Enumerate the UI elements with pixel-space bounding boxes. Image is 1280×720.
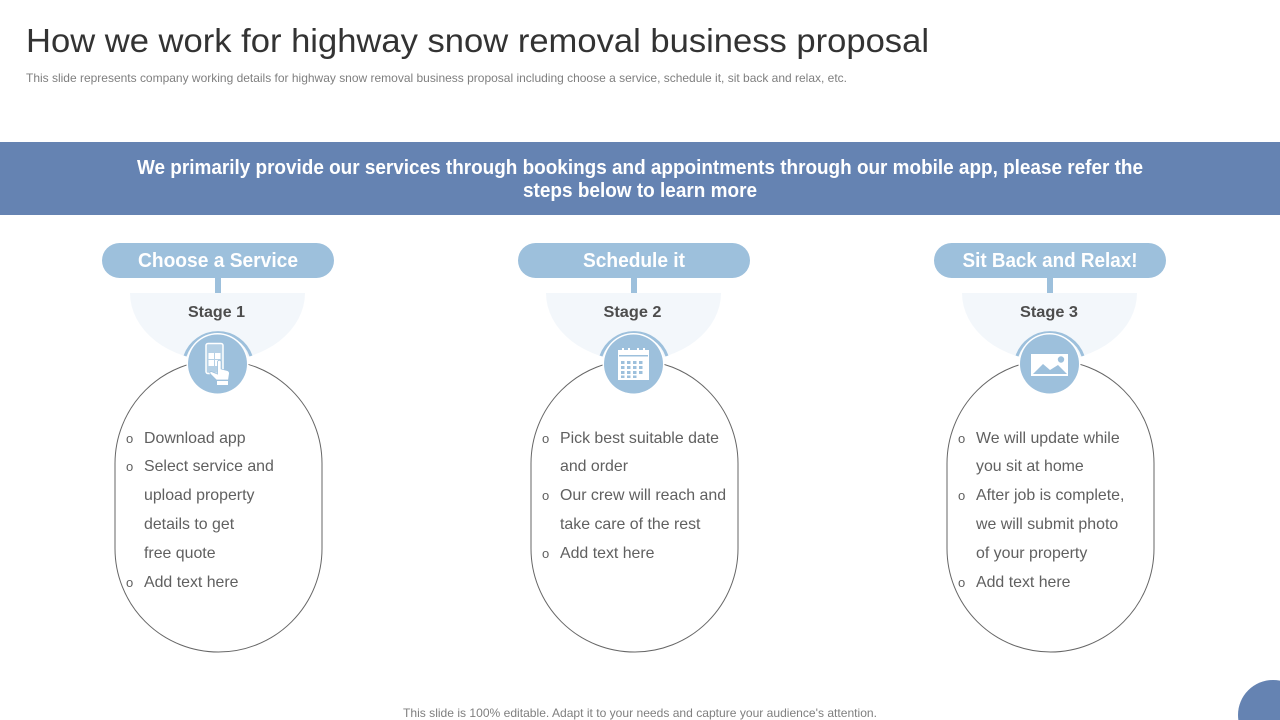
stage 2 list: Our crew will reach and [560, 487, 726, 504]
panel: stage 3 [934, 243, 1166, 652]
stage 1 list: o [126, 575, 133, 590]
stage 2 list: take care of the rest [560, 516, 701, 533]
stage 3 label: Stage 3 [1020, 304, 1078, 321]
stage 3 list: o [958, 488, 965, 503]
stage 2 list: and order [560, 458, 629, 475]
banner: We primarily provide our services through bookings and appointments through our mobile app, please refer the [137, 157, 1143, 179]
banner: steps below to learn more [523, 180, 757, 202]
footer note: This slide is 100% editable. Adapt it to your needs and capture your audience's attention. [403, 706, 877, 720]
stage 1 list: Add text here [144, 574, 239, 591]
stage 2 list: Pick best suitable date [560, 430, 719, 447]
stage 3 oval [947, 360, 1154, 652]
stage 3 list: you sit at home [976, 458, 1084, 475]
stage 3 connector [1047, 278, 1053, 293]
stage 3 list: o [958, 431, 965, 446]
stage 1 list: upload property [144, 487, 254, 504]
corner circle [1238, 680, 1280, 720]
stage 1 oval [115, 360, 322, 652]
stage 1 list [126, 430, 274, 591]
stage 2 label: Stage 2 [604, 304, 662, 321]
stage 3 list: We will update while [976, 430, 1120, 447]
stage 1 list: Select service and [144, 458, 274, 475]
stage 3 pill heading: Sit Back and Relax! [962, 250, 1138, 272]
stage 2 list: o [542, 488, 549, 503]
stage 3 list: of your property [976, 545, 1087, 562]
stage 1 list: free quote [144, 545, 216, 562]
panel: stage 2 [518, 243, 750, 652]
stage 3 half circle [962, 293, 1137, 361]
panel: stage 1 [102, 243, 334, 652]
stage 3 list [958, 430, 1124, 591]
stage 2 list: Add text here [560, 545, 655, 562]
stage 3 list: o [958, 575, 965, 590]
banner [0, 142, 1280, 215]
stage 1 list: details to get [144, 516, 235, 533]
stage 1 connector [215, 278, 221, 293]
stage 2 connector [631, 278, 637, 293]
stage 1 pill heading: Choose a Service [138, 250, 298, 272]
stage 1 label: Stage 1 [188, 304, 245, 321]
icon: calendar [601, 333, 667, 395]
stage 2 list: o [542, 546, 549, 561]
icon: phone touch [185, 333, 251, 395]
stage 2 pill heading [518, 243, 750, 278]
stage 1 list: o [126, 459, 133, 474]
title: How we work for highway snow removal business proposal [26, 22, 929, 59]
stage 2 pill heading: Schedule it [583, 250, 685, 272]
stage 2 list [542, 430, 726, 562]
subtitle: This slide represents company working details for highway snow removal business proposal including choose a service, schedule it, sit back and relax, etc. [26, 71, 847, 85]
stage 3 list: After job is complete, [976, 487, 1124, 504]
stage 2 list: o [542, 431, 549, 446]
stage 1 list: Download app [144, 430, 246, 447]
stage 3 list: Add text here [976, 574, 1071, 591]
stage 1 list: o [126, 431, 133, 446]
stage 1 half circle [130, 293, 305, 361]
icon: picture [1017, 333, 1083, 395]
stage 1 pill heading [102, 243, 334, 278]
stage 2 half circle [546, 293, 721, 361]
stage 3 pill heading [934, 243, 1166, 278]
stage 2 oval [531, 360, 738, 652]
stage 3 list: we will submit photo [975, 516, 1118, 533]
